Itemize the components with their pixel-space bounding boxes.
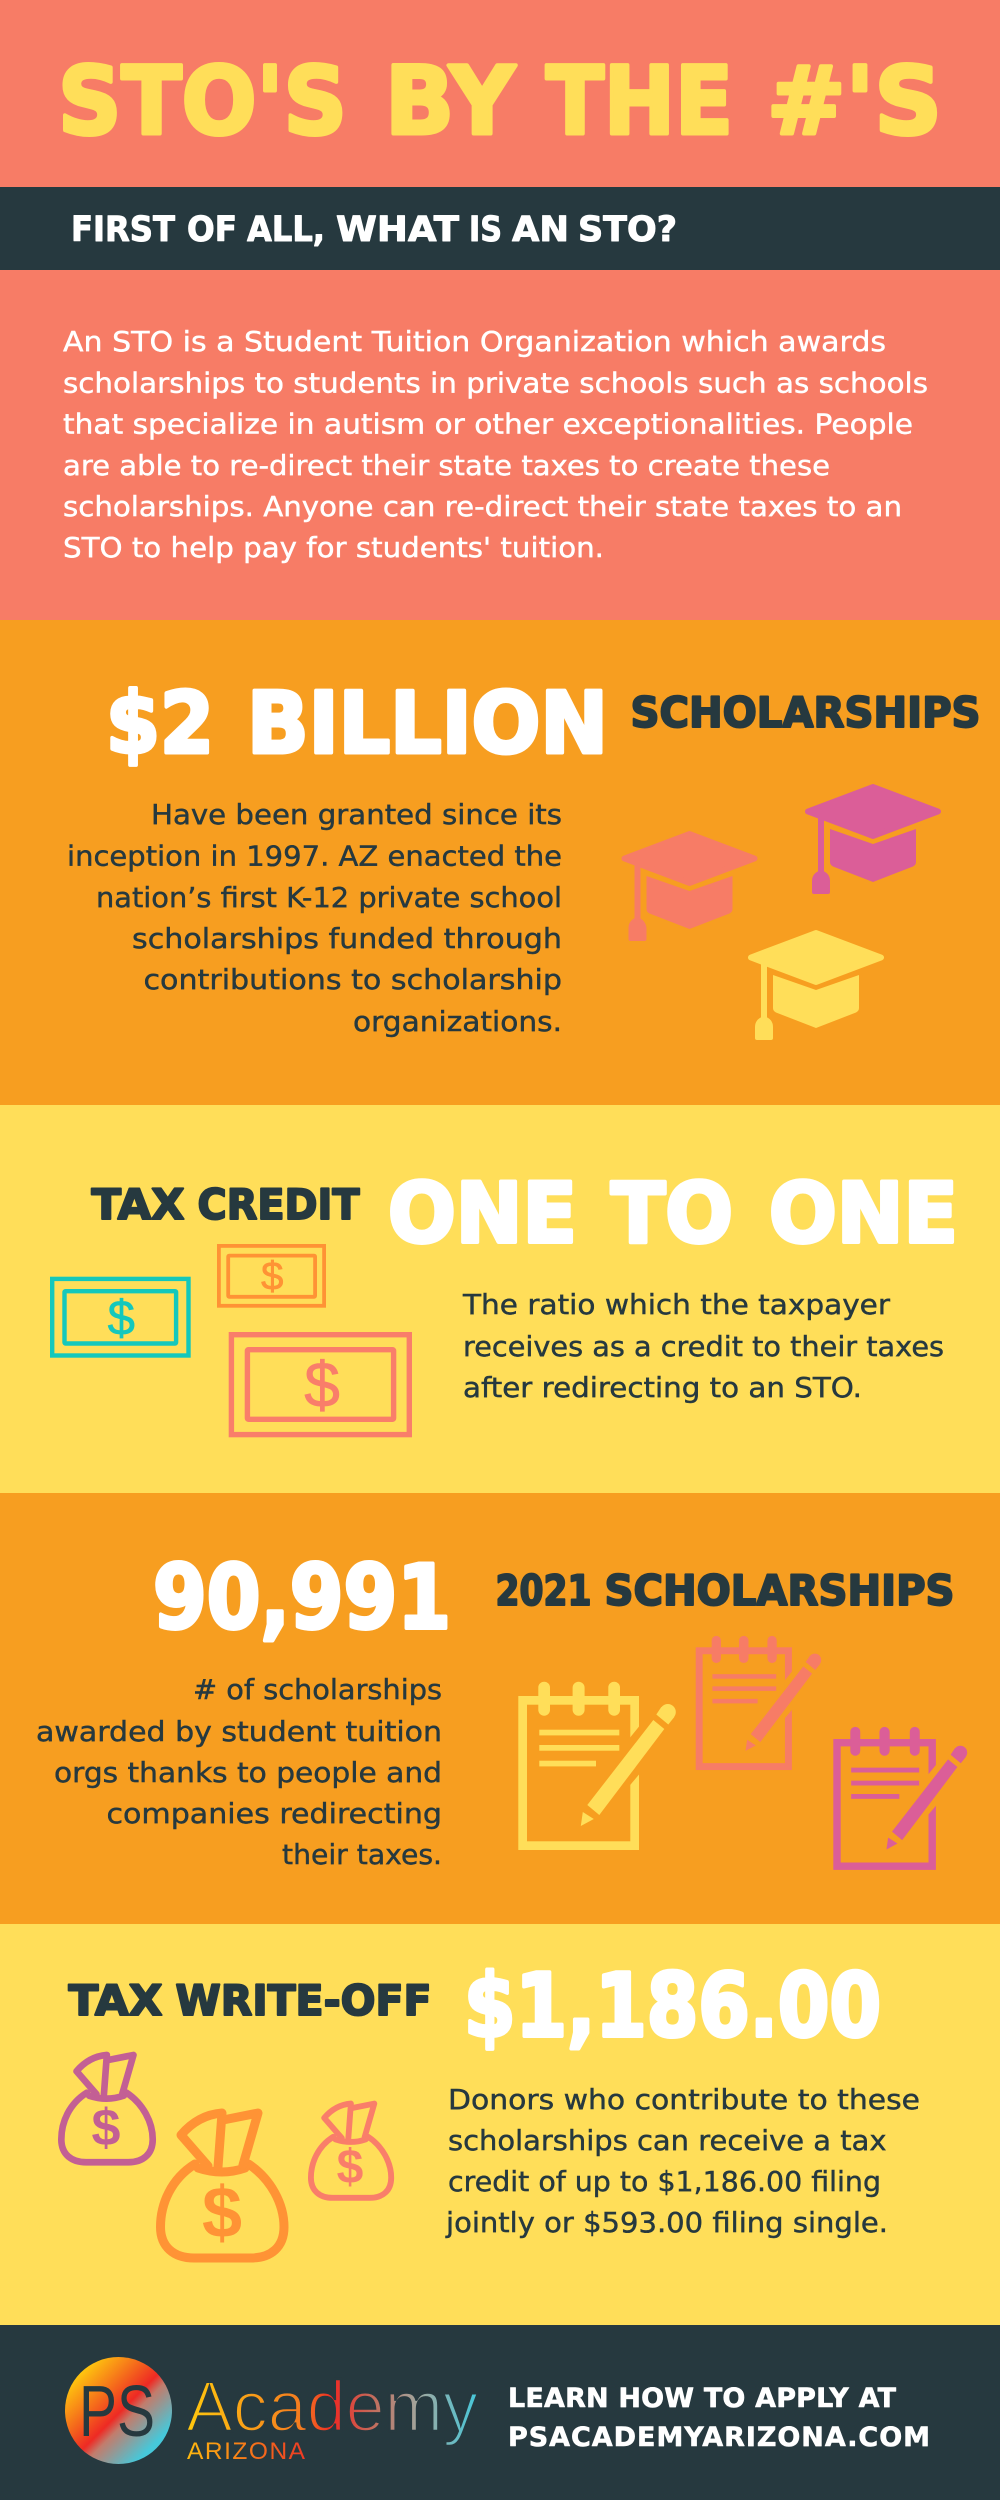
text block: since 1997: scholarships funded through (132, 922, 562, 955)
stat: one to one: ONE (388, 1165, 577, 1262)
text block: since 1997: inception in 1997. AZ enacted the (67, 840, 562, 872)
logo: PS Academy Arizona (65, 2357, 478, 2465)
stat: $2 billion: BILLION (247, 674, 608, 774)
text block: donors: jointly or $593.00 filing single. (445, 2206, 888, 2239)
panel: tax credit one to one (0, 1105, 1000, 1493)
icon: salmon notepad and pencil (699, 1636, 821, 1767)
heading: what is an STO: WHAT (336, 210, 460, 250)
panel: title header (0, 0, 1000, 187)
text block: ratio: after redirecting to an STO. (463, 1371, 862, 1404)
heading: 2021 scholarships: SCHOLARSHIPS (604, 1566, 954, 1615)
text block: scholarships awarded: companies redirecting (106, 1797, 442, 1830)
panel: introduction (0, 270, 1000, 620)
icon: teal banknote: $ (108, 1292, 135, 1346)
stat: one to one: TO (611, 1165, 733, 1262)
title: #'S (767, 48, 942, 156)
panel: 90,991 scholarships (0, 1493, 1000, 1924)
icon: orange money bag: $ (202, 2173, 242, 2253)
panel: footer (0, 2325, 1000, 2500)
icon: teal banknote (52, 1279, 189, 1356)
text block: STO definition (63, 325, 928, 564)
title: BY (385, 48, 516, 156)
icon: pink graduation cap (808, 787, 938, 894)
heading: what is an STO: STO? (578, 210, 677, 250)
icon: salmon banknote: $ (304, 1349, 340, 1421)
text block: scholarships awarded: their taxes. (282, 1838, 442, 1871)
text block: STO definition: An STO is a Student Tuition Organization which awards (63, 325, 886, 358)
heading: tax write-off: WRITE-OFF (176, 1976, 432, 2025)
icon: yellow graduation cap (751, 933, 881, 1040)
panel: subheading bar (0, 187, 1000, 270)
icon: salmon graduation cap (624, 834, 754, 941)
icon: salmon money bag (311, 2104, 391, 2198)
icon: pink money bag (61, 2055, 153, 2162)
heading: tax credit: TAX (92, 1180, 184, 1229)
text block: STO definition: STO to help pay for students' tuition. (63, 531, 604, 564)
text block: STO definition: are able to re-direct their state taxes to create these (63, 449, 830, 482)
logo wordmark: Academy: Academy (186, 2368, 478, 2447)
text block: STO definition: scholarships. Anyone can re-direct their state taxes to an (63, 490, 902, 523)
text block: scholarships awarded: # of scholarships (193, 1673, 442, 1706)
heading: tax credit (92, 1180, 360, 1229)
text block: since 1997: contributions to scholarship (144, 963, 562, 996)
heading: tax write-off: TAX (68, 1976, 162, 2025)
text block: since 1997: nation’s first K-12 private school (96, 881, 562, 914)
logo badge (65, 2357, 172, 2464)
icon: pink notepad and pencil (837, 1727, 967, 1866)
icon: yellow notepad and pencil (523, 1682, 676, 1846)
heading: what is an STO: OF (187, 210, 237, 250)
icon: salmon money bag: $ (337, 2141, 364, 2194)
heading: tax write-off (68, 1976, 432, 2025)
text block: since 1997 (67, 798, 562, 1038)
heading: what is an STO (71, 210, 677, 250)
call to action: PSACADEMYARIZONA.COM (508, 2422, 930, 2453)
icon: salmon banknote (231, 1335, 409, 1435)
text block: since 1997: Have been granted since its (151, 798, 562, 831)
icon: orange banknote: $ (261, 1255, 283, 1299)
text block: ratio (462, 1288, 944, 1404)
text block: STO definition: scholarships to students in private schools such as schools (63, 366, 928, 400)
title: STO'S (58, 48, 347, 156)
title (58, 48, 942, 156)
text block: donors: Donors who contribute to these (448, 2083, 920, 2116)
stat: $2 billion (106, 674, 608, 774)
text block: scholarships awarded: orgs thanks to people and (54, 1756, 442, 1789)
stat: 90,991: 90,991 (153, 1546, 451, 1649)
logo badge: PS (79, 2372, 155, 2452)
text block: ratio: The ratio which the taxpayer (462, 1288, 891, 1321)
heading: tax credit: CREDIT (198, 1180, 360, 1229)
icon: pink money bag: $ (92, 2099, 121, 2157)
stat: one to one (388, 1165, 958, 1262)
heading: scholarships: SCHOLARSHIPS (630, 688, 980, 737)
logo wordmark: Arizona: ARIZONA (187, 2438, 306, 2465)
text block: scholarships awarded (36, 1673, 442, 1871)
panel: $2 billion scholarships (0, 620, 1000, 1105)
icon: orange money bag (160, 2113, 284, 2258)
text block: donors: scholarships can receive a tax (448, 2124, 886, 2157)
heading: what is an STO: AN (512, 210, 569, 250)
panel: tax write-off (0, 1924, 1000, 2325)
text block: since 1997: organizations. (353, 1005, 562, 1038)
stat: $2 billion: $2 (106, 674, 214, 774)
stat: $1,186.00: $1,186.00 (464, 1955, 881, 2057)
text block: scholarships awarded: awarded by student tuition (36, 1715, 442, 1748)
heading: what is an STO: IS (469, 210, 502, 250)
heading: 2021 scholarships: 2021 (496, 1566, 592, 1615)
text block: donors (445, 2083, 920, 2239)
icon: orange banknote (219, 1246, 324, 1306)
text block: STO definition: that specialize in autism or other exceptionalities. People (63, 408, 913, 440)
text block: ratio: receives as a credit to their taxes (463, 1330, 944, 1363)
heading: what is an STO: FIRST (71, 210, 175, 250)
call to action: LEARN HOW TO APPLY AT (508, 2383, 897, 2414)
title: THE (546, 48, 733, 156)
stat: one to one: ONE (769, 1165, 958, 1262)
text block: donors: credit of up to $1,186.00 filing (448, 2165, 881, 2198)
heading: what is an STO: ALL, (247, 210, 325, 250)
call to action (508, 2383, 930, 2453)
